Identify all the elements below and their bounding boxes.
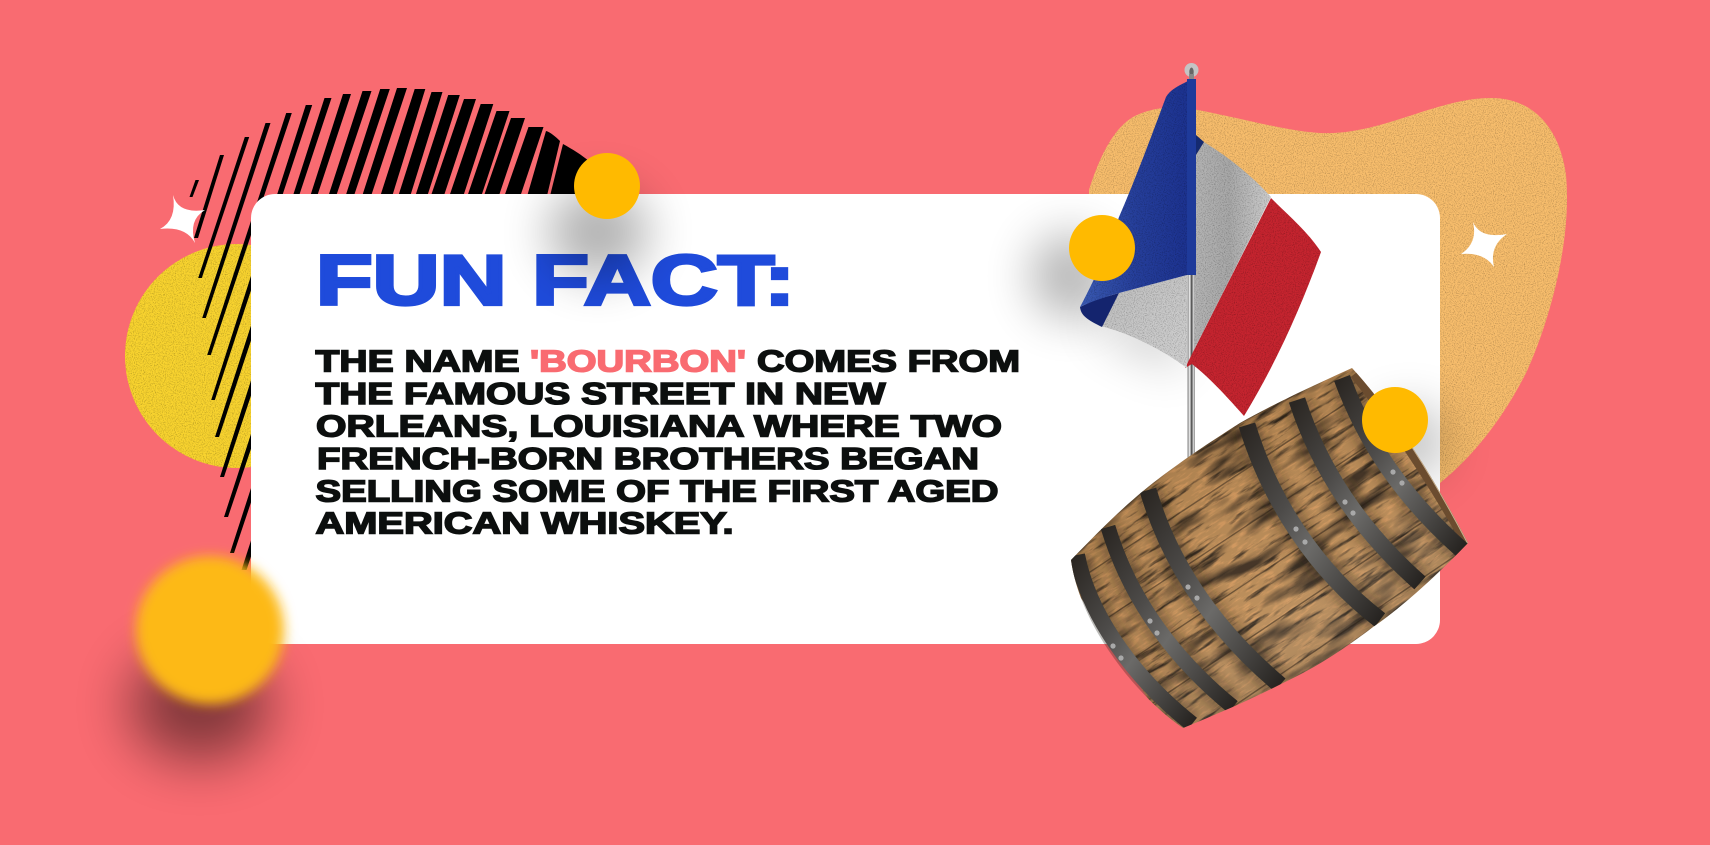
yellow circle (125, 244, 349, 468)
flag white stripe right (1194, 142, 1271, 350)
body text: 'BOURBON' (530, 344, 746, 378)
barrel stave seams (1076, 388, 1456, 709)
yellow dot on barrel (1362, 387, 1428, 453)
body text: COMES FROM (757, 344, 1020, 378)
flag pole finial (1184, 63, 1198, 79)
flag white stripe left (1101, 275, 1187, 368)
yellow dot on flag (1069, 215, 1135, 281)
shadow: flag circle and flag (1032, 234, 1180, 375)
barrel rim edge (1368, 386, 1468, 544)
barrel hoops (1077, 378, 1462, 724)
body text: SELLING SOME OF THE FIRST AGED (316, 474, 998, 508)
white card (251, 194, 1440, 644)
body text: ORLEANS, LOUISIANA WHERE TWO (316, 410, 1002, 444)
flag red stripe (1185, 198, 1321, 416)
flag sleeve (1187, 79, 1196, 275)
barrel inner rim (1357, 372, 1470, 542)
flag fold shadow (1196, 135, 1204, 155)
flag pole (1188, 275, 1195, 470)
yellow dot top (574, 153, 640, 219)
orange blob (1089, 98, 1567, 483)
shadow: top circle (548, 186, 648, 278)
shadow: blurred circle (130, 650, 270, 760)
sparkle right (1461, 222, 1507, 267)
whiskey barrel (1071, 368, 1468, 728)
body text: THE NAME (316, 344, 520, 378)
sparkle left (160, 195, 205, 243)
body text: AMERICAN WHISKEY. (316, 506, 734, 540)
body text: FRENCH-BORN BROTHERS BEGAN (317, 442, 979, 476)
body text (316, 344, 1020, 540)
barrel rivets (1110, 469, 1405, 661)
flag blue stripe (1080, 81, 1188, 307)
black striped dome (190, 88, 544, 570)
body text: THE FAMOUS STREET IN NEW (316, 377, 886, 411)
heading: fun fact: FUN FACT: (316, 240, 795, 320)
french flag on pole (1080, 63, 1321, 470)
black dome right wedge (526, 131, 600, 200)
flag dark blue fold (1080, 293, 1119, 327)
shadow: barrel circle (1374, 406, 1446, 478)
barrel hoop shadows (1077, 378, 1462, 724)
blurred yellow circle (136, 556, 284, 704)
barrel wood (1071, 368, 1468, 728)
